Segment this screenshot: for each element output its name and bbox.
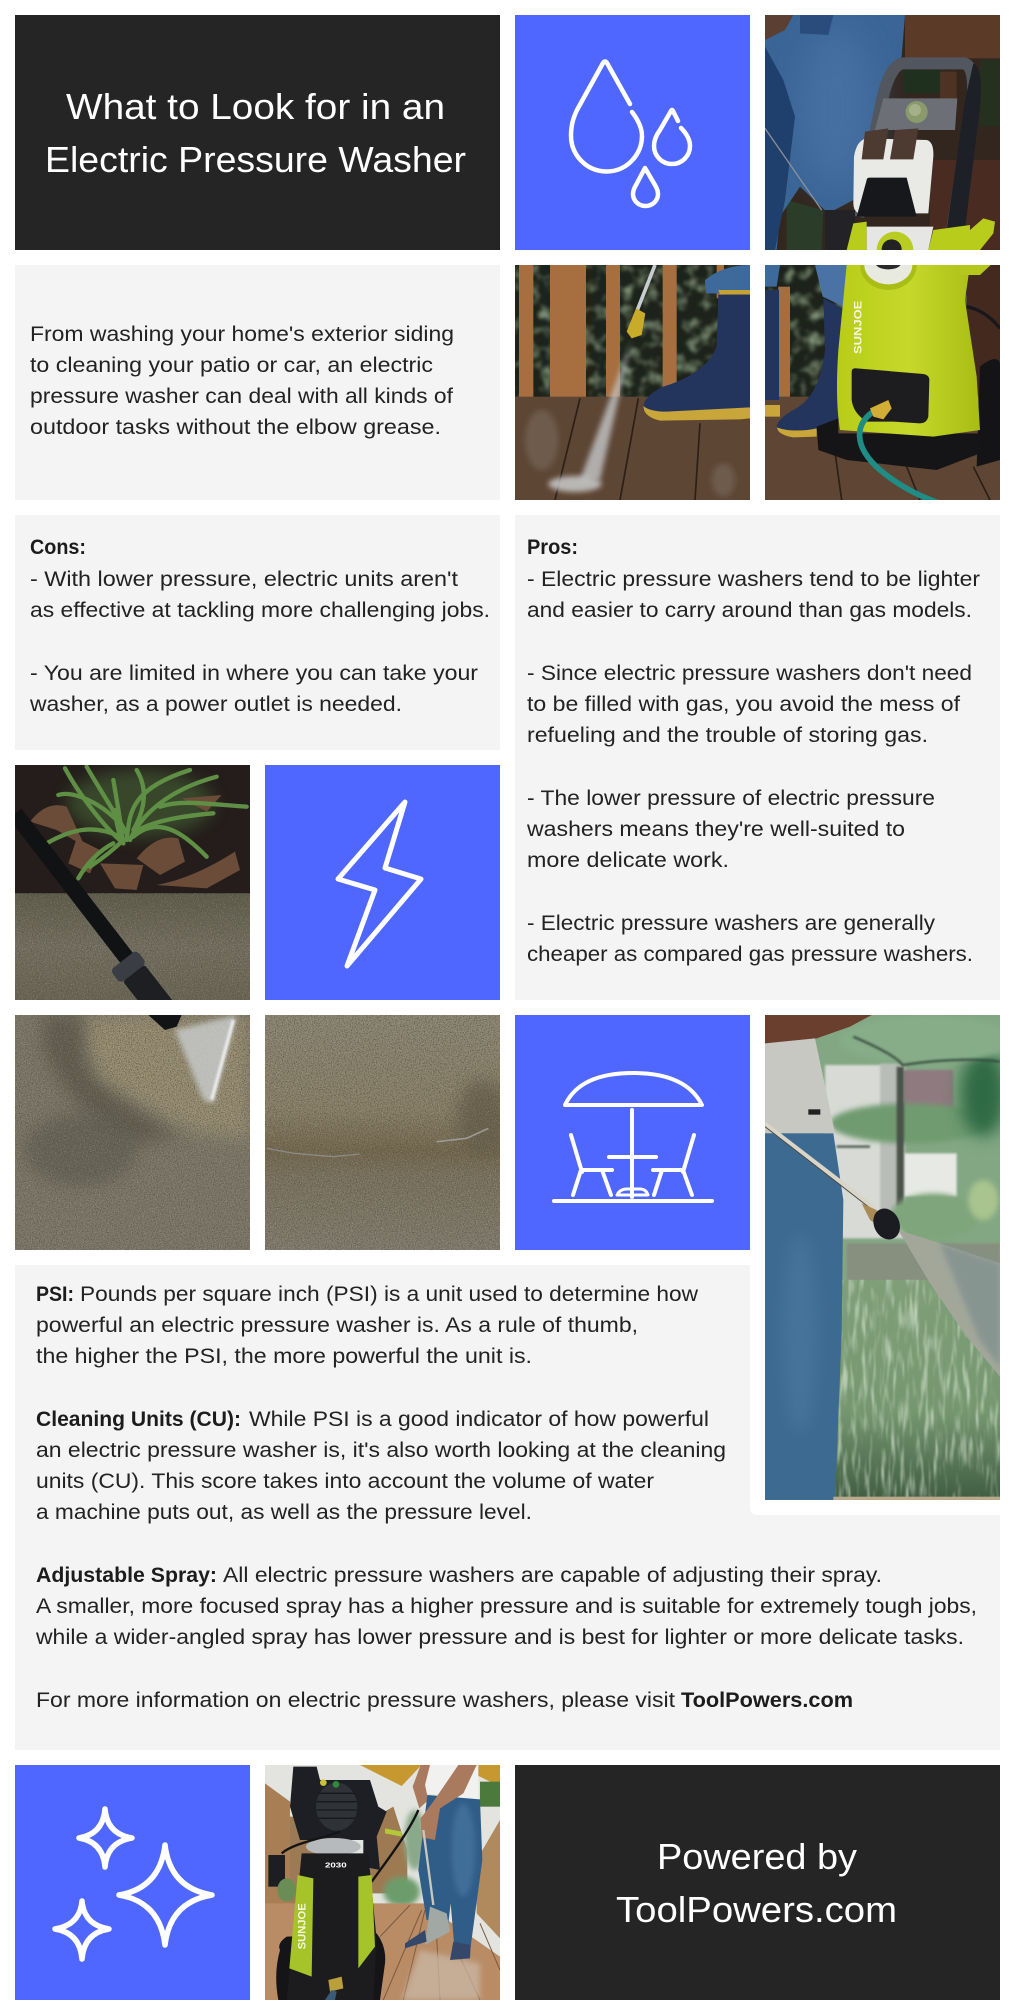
cons list: - With lower pressure, electric units aren't bbox=[30, 567, 458, 591]
intro text: outdoor tasks without the elbow grease. bbox=[30, 415, 441, 439]
PSI text bbox=[36, 1282, 698, 1368]
icon panel: lightning bolt bbox=[265, 765, 500, 1000]
intro text: From washing your home's exterior siding bbox=[30, 322, 454, 346]
adjustable spray text: All electric pressure washers are capable of adjusting their spray. bbox=[223, 1563, 882, 1587]
photo: yellow pressure washer body with hose bbox=[765, 265, 1000, 500]
intro text panel bbox=[15, 265, 500, 500]
photo: pressure washer on wooden deck with person bbox=[265, 1765, 500, 2000]
icon panel: water drops bbox=[515, 15, 750, 250]
footer text bbox=[616, 1836, 897, 1930]
adjustable spray text: Adjustable Spray: bbox=[36, 1563, 217, 1587]
photo: pressure washer and jeans, upper half bbox=[765, 15, 1000, 268]
pros list: cheaper as compared gas pressure washers. bbox=[527, 942, 973, 966]
pros list: - The lower pressure of electric pressure bbox=[527, 786, 935, 810]
cons list: washer, as a power outlet is needed. bbox=[29, 692, 402, 716]
cleaning units text bbox=[36, 1407, 726, 1524]
photo: yellow pressure washer body with hose: SUNJOE bbox=[853, 300, 865, 354]
cleaning units text: units (CU). This score takes into account the volume of water bbox=[36, 1469, 654, 1493]
adjustable spray text bbox=[35, 1563, 977, 1649]
title panel bbox=[15, 15, 500, 250]
photo: nozzle spraying dirty concrete bbox=[15, 1015, 250, 1250]
heading bbox=[45, 86, 466, 180]
pros list: - Electric pressure washers tend to be lighter bbox=[527, 567, 980, 591]
photo: pressure washer on wooden deck with person: SUNJOE bbox=[297, 1903, 309, 1949]
pros heading: Pros: bbox=[527, 535, 578, 559]
cons panel bbox=[15, 515, 500, 750]
footer text: Powered by bbox=[657, 1836, 857, 1877]
photo: cleaned concrete with crack bbox=[265, 1015, 510, 1250]
cleaning units text: an electric pressure washer is, it's also worth looking at the cleaning bbox=[36, 1438, 726, 1462]
pros list: to be filled with gas, you avoid the mess of bbox=[527, 692, 960, 716]
pros list: - Electric pressure washers are generally bbox=[527, 911, 935, 935]
adjustable spray text: while a wider-angled spray has lower pressure and is best for lighter or more delicate tasks. bbox=[35, 1625, 964, 1649]
PSI text: Pounds per square inch (PSI) is a unit used to determine how bbox=[80, 1282, 698, 1306]
adjustable spray text: A smaller, more focused spray has a higher pressure and is suitable for extremely tough jobs, bbox=[36, 1594, 977, 1618]
intro text: to cleaning your patio or car, an electric bbox=[30, 353, 433, 377]
heading: Electric Pressure Washer bbox=[45, 139, 466, 180]
details text panel bbox=[15, 1265, 1000, 1750]
photo: spray on wooden deck and boot bbox=[515, 265, 750, 500]
cleaning units text: While PSI is a good indicator of how powerful bbox=[249, 1407, 709, 1431]
footer panel bbox=[515, 1765, 1000, 2000]
photo: person in jeans spraying garden bbox=[765, 1015, 1013, 1500]
cons list: as effective at tackling more challenging jobs. bbox=[30, 598, 490, 622]
intro text: pressure washer can deal with all kinds of bbox=[30, 384, 453, 408]
icon panel: sparkles bbox=[15, 1765, 250, 2000]
cleaning units text: a machine puts out, as well as the pressure level. bbox=[36, 1500, 532, 1524]
PSI text: the higher the PSI, the more powerful the unit is. bbox=[36, 1344, 532, 1368]
cons list bbox=[29, 567, 490, 716]
pros panel bbox=[515, 515, 1000, 1000]
more information text: ToolPowers.com bbox=[681, 1688, 853, 1712]
photo: pressure washer on wooden deck with person: 2030 bbox=[325, 1862, 347, 1869]
icon panel: patio table and chairs bbox=[515, 1015, 750, 1250]
intro text bbox=[30, 322, 454, 439]
heading: What to Look for in an bbox=[66, 86, 445, 127]
pros list: washers means they're well-suited to bbox=[526, 817, 905, 841]
pros list: more delicate work. bbox=[527, 848, 729, 872]
cons heading: Cons: bbox=[30, 535, 86, 559]
pros list: and easier to carry around than gas models. bbox=[527, 598, 972, 622]
pros list: refueling and the trouble of storing gas. bbox=[527, 723, 928, 747]
pros list bbox=[526, 567, 980, 966]
photo: plant, leaves and wand over concrete bbox=[15, 765, 250, 1023]
more information text: For more information on electric pressure washers, please visit bbox=[36, 1688, 675, 1712]
PSI text: powerful an electric pressure washer is. As a rule of thumb, bbox=[36, 1313, 638, 1337]
footer text: ToolPowers.com bbox=[616, 1889, 897, 1930]
cleaning units text: Cleaning Units (CU): bbox=[36, 1407, 241, 1431]
pros list: - Since electric pressure washers don't need bbox=[527, 661, 972, 685]
PSI text: PSI: bbox=[36, 1282, 74, 1306]
cons list: - You are limited in where you can take your bbox=[30, 661, 478, 685]
